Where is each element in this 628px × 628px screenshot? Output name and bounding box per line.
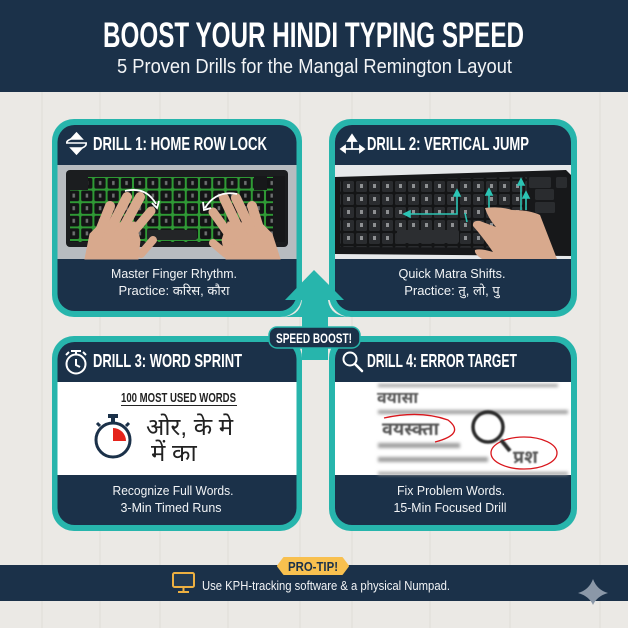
drill 2 caption: Practice: तु, लो, पु [404, 283, 501, 299]
red circles [384, 414, 557, 469]
drill 1 heading: DRILL 1: HOME ROW LOCK [93, 133, 267, 154]
drill 4 caption [394, 483, 507, 515]
pro-tip badge: PRO-TIP! [288, 559, 338, 574]
drill 4 caption: Fix Problem Words. [397, 483, 505, 498]
drill 3 heading: DRILL 3: WORD SPRINT [93, 350, 242, 371]
panel: drill 2 [329, 119, 577, 317]
keyboard photo with hands [58, 165, 296, 259]
blurred document [335, 382, 571, 475]
motion arrows [125, 190, 237, 210]
drill 3 caption [112, 483, 234, 515]
drill 2 caption [398, 266, 506, 299]
left hand [85, 197, 153, 259]
drill 1 caption: Master Finger Rhythm. [111, 266, 237, 281]
footer tip bar [0, 558, 628, 605]
hindi words [146, 413, 234, 467]
drill 3 caption: 3-Min Timed Runs [120, 500, 222, 515]
icon: sparkle [578, 579, 608, 605]
panel: drill 1 [52, 119, 302, 317]
hindi words: ओर, के मे [146, 413, 234, 441]
icon: monitor [173, 573, 194, 592]
panel: drill 4 [329, 336, 577, 531]
drill 2 heading: DRILL 2: VERTICAL JUMP [367, 133, 529, 154]
blurred text lines [378, 384, 568, 475]
icon: vertical jump arrows [341, 135, 364, 152]
keyboard photo with hand [335, 165, 571, 259]
blurred words: प्रश [513, 447, 538, 467]
badge: speed boost: SPEED BOOST! [276, 331, 352, 346]
hindi words: में का [151, 439, 197, 467]
icon: stopwatch with red wedge [96, 414, 130, 457]
word sprint panel [58, 382, 296, 475]
drill 2 caption: Quick Matra Shifts. [398, 266, 506, 281]
blurred words: वयस्क्ता [382, 419, 440, 439]
icon: stopwatch [66, 351, 86, 374]
panel: drill 3 [52, 336, 302, 531]
icon: magnifier [344, 352, 362, 371]
blurred words [377, 390, 538, 467]
tip text: Use KPH-tracking software & a physical Numpad. [202, 578, 450, 593]
hand [473, 207, 557, 259]
icon: arrows compass [66, 133, 87, 154]
list title: 100 MOST USED WORDS [121, 390, 236, 405]
blurred words: वयासा [377, 390, 418, 407]
drill 4 heading: DRILL 4: ERROR TARGET [367, 350, 517, 371]
title banner [0, 0, 628, 92]
drill 3 caption: Recognize Full Words. [112, 483, 234, 498]
subtitle: 5 Proven Drills for the Mangal Remington Layout [117, 56, 512, 78]
badge: speed boost [269, 327, 360, 348]
right hand [213, 198, 280, 259]
drill 1 caption: Practice: करिस, कौरा [119, 283, 230, 298]
jump arrows [404, 179, 529, 222]
drill 1 caption [111, 266, 237, 298]
drill 4 caption: 15-Min Focused Drill [394, 500, 507, 515]
arrow: speed up [280, 270, 352, 360]
magnifier [473, 412, 510, 451]
